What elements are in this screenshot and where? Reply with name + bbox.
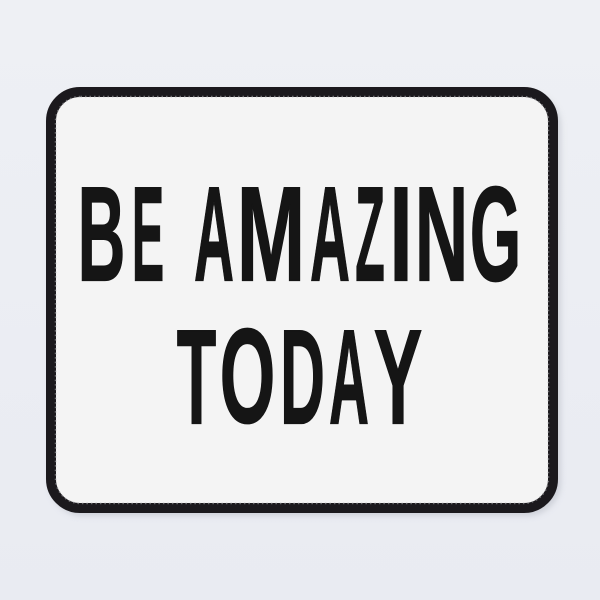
slogan line 1: BE AMAZING: M: [237, 159, 305, 309]
slogan line 1: BE AMAZING: I: [389, 158, 413, 309]
mat surface: [50, 91, 554, 509]
mat shadow: [49, 92, 561, 516]
mouse pad: [50, 91, 554, 509]
slogan line 2: TODAY: [177, 300, 422, 453]
slogan line 1: BE AMAZING: B: [78, 159, 125, 310]
slogan line 1: BE AMAZING: N: [415, 159, 468, 310]
slogan line 2: TODAY: Y: [374, 302, 422, 452]
slogan line 2: TODAY: O: [220, 300, 275, 451]
slogan line 1: BE AMAZING: A: [194, 159, 234, 309]
stitched black border: [51, 92, 553, 508]
slogan line 1: BE AMAZING: E: [132, 159, 164, 310]
slogan line 2: TODAY: T: [177, 302, 216, 453]
slogan line 1: BE AMAZING: [78, 158, 521, 310]
slogan line 2: TODAY: D: [280, 303, 325, 453]
slogan line 1: BE AMAZING: G: [470, 159, 521, 310]
slogan line 2: TODAY: A: [329, 302, 369, 452]
slogan line 1: BE AMAZING: A: [310, 159, 350, 309]
slogan line 1: BE AMAZING: Z: [355, 159, 385, 310]
